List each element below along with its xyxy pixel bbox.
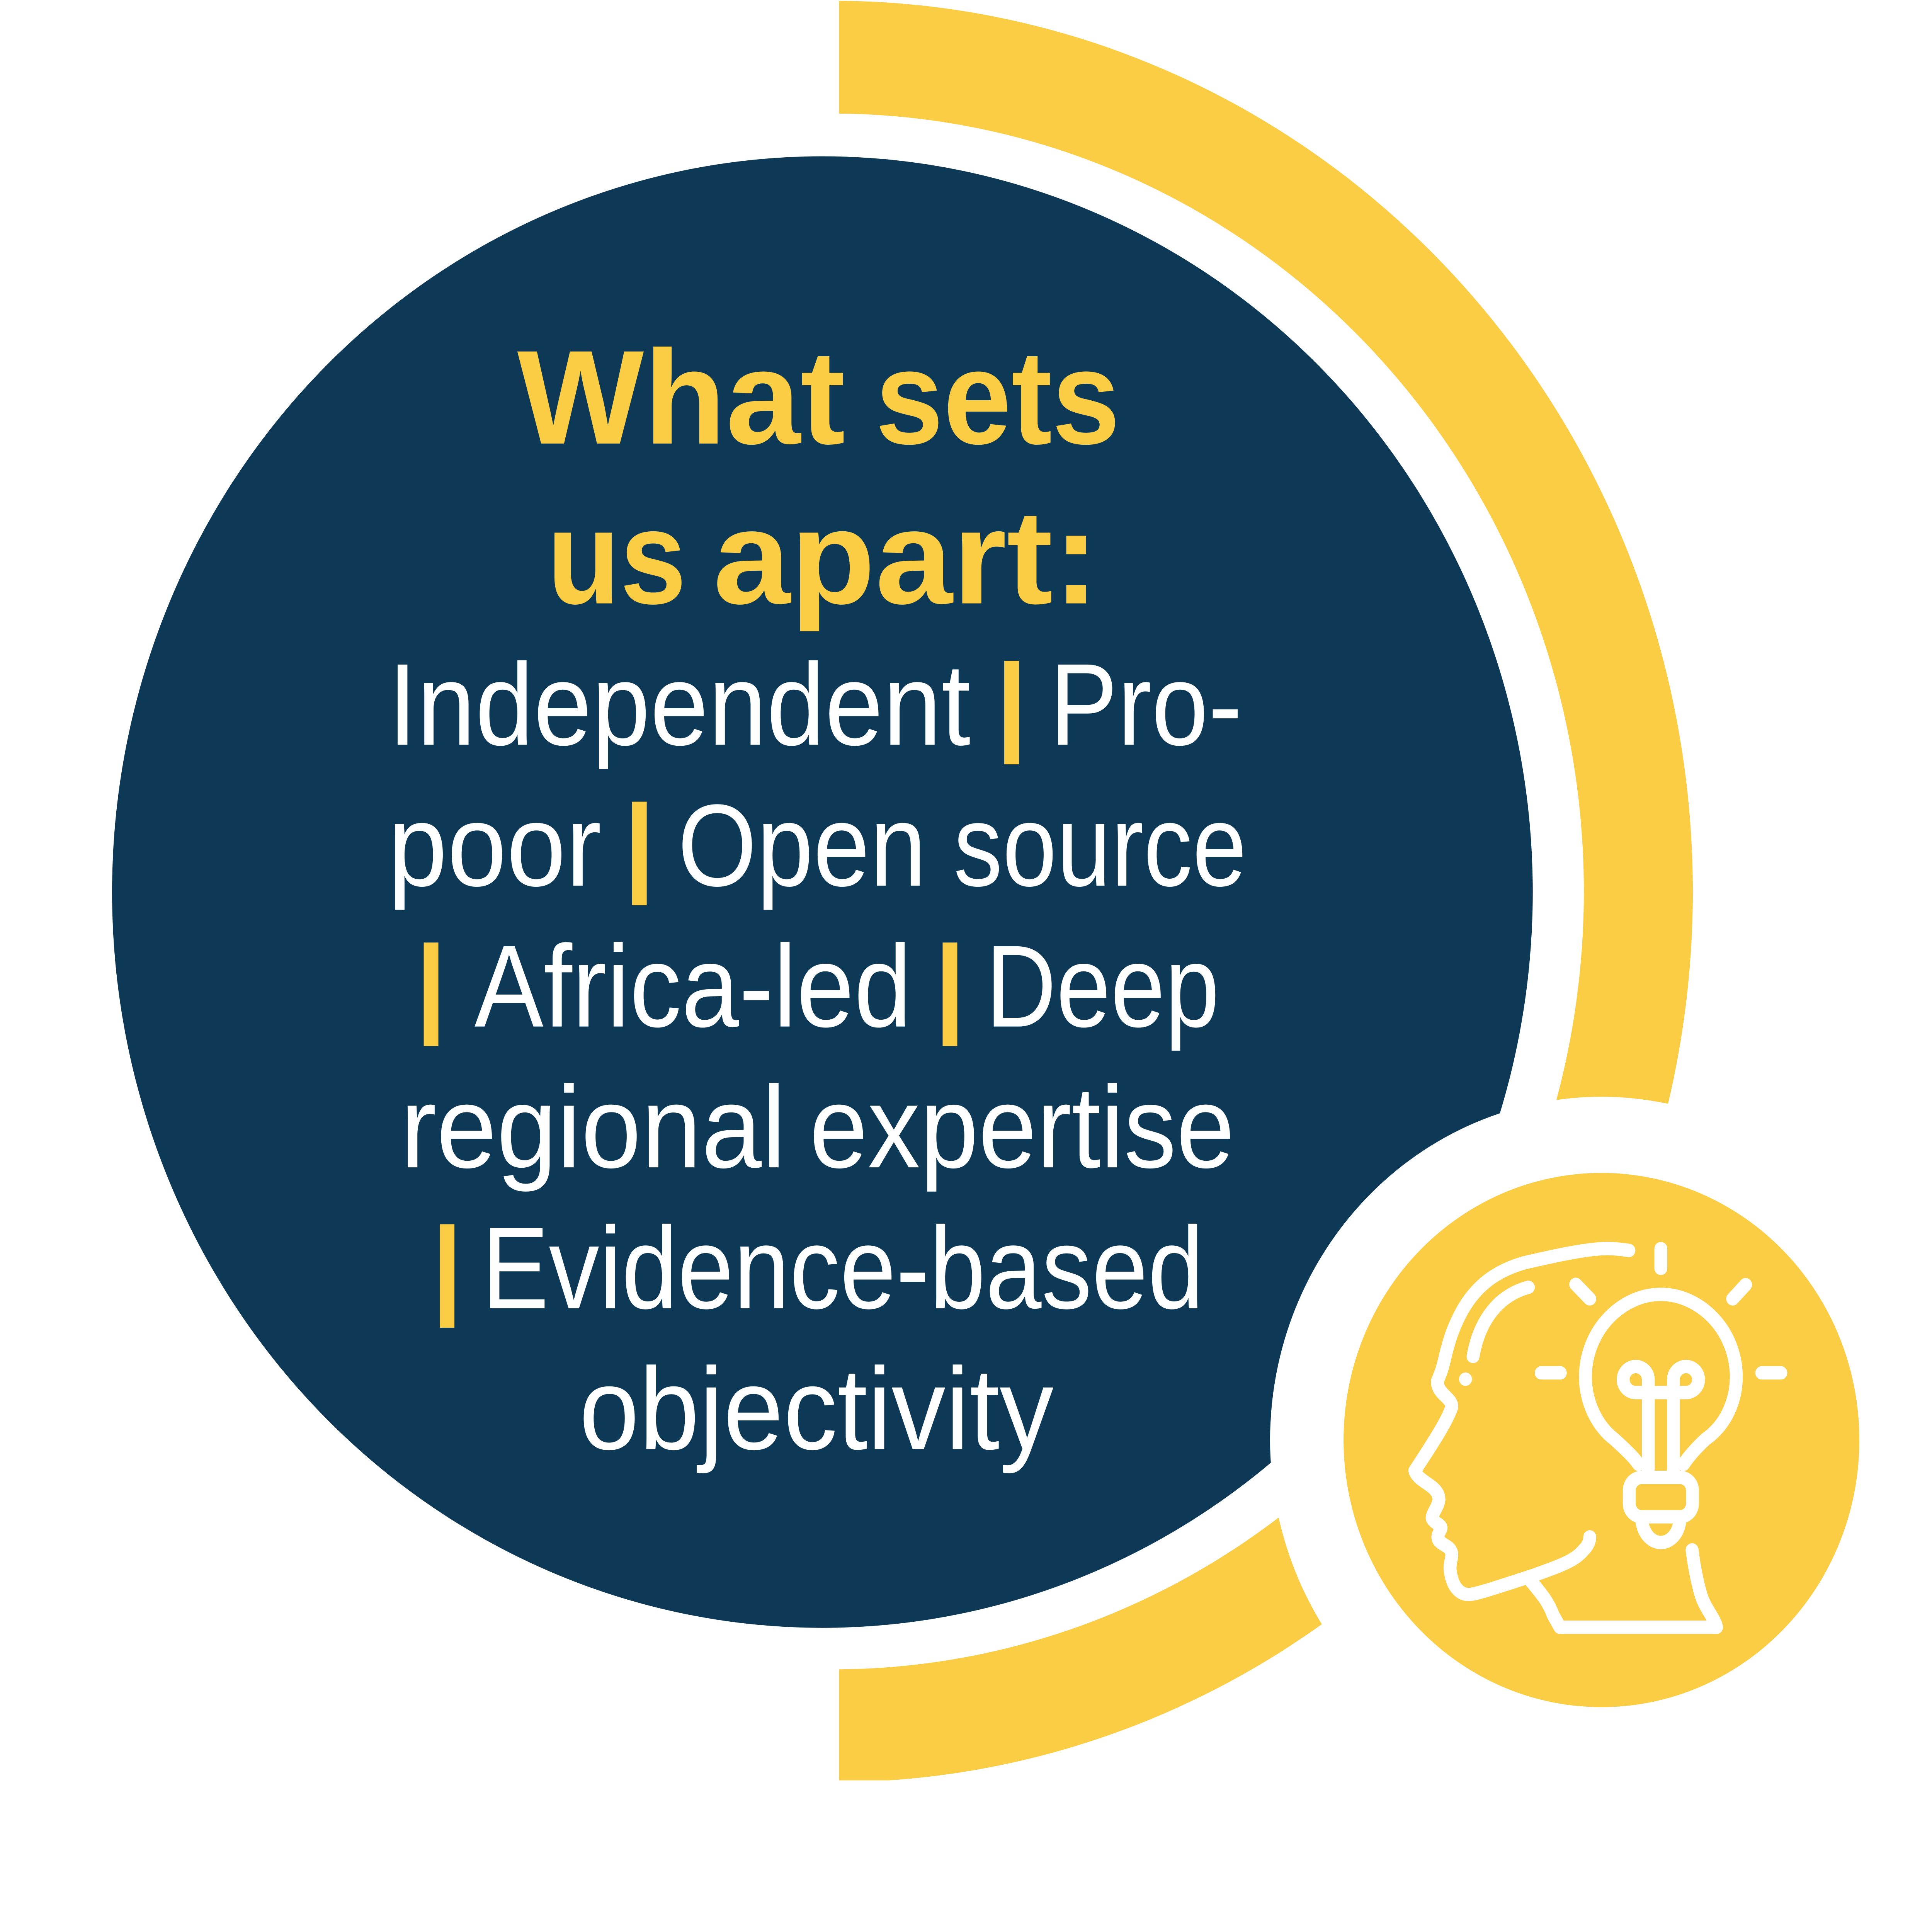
text block: list of attributes (388, 639, 1247, 1475)
heading: What sets us apart (517, 323, 1120, 633)
text block: list of attributes: Africa-led (474, 921, 912, 1051)
text block: list of attributes: Pro- (1049, 639, 1242, 770)
text block: list of attributes: objectivity (579, 1344, 1054, 1475)
heading: What sets us apart: us (547, 483, 686, 632)
text block: list of attributes: Independent (388, 639, 971, 770)
text block: list of attributes: source (954, 780, 1247, 910)
heading: What sets us apart: sets (875, 323, 1120, 472)
panel: navy circle (112, 156, 1533, 1628)
icon badge: yellow circle (1344, 1173, 1859, 1707)
white halo around icon badge (1270, 1097, 1932, 1783)
icon: head with light bulb (1415, 1248, 1781, 1627)
text block: list of attributes: poor (388, 780, 601, 911)
text block: list of attributes: Open (678, 780, 926, 911)
text block: list of attributes: Deep (986, 921, 1219, 1052)
outer yellow ring arc (839, 1, 1693, 1781)
text block: list of attributes: Evidence-based (482, 1202, 1204, 1333)
heading: What sets us apart: What (517, 323, 845, 472)
text block: list of attributes: expertise (810, 1061, 1235, 1193)
text block: list of attributes: regional (400, 1061, 786, 1193)
heading: What sets us apart: apart: (713, 483, 1099, 633)
